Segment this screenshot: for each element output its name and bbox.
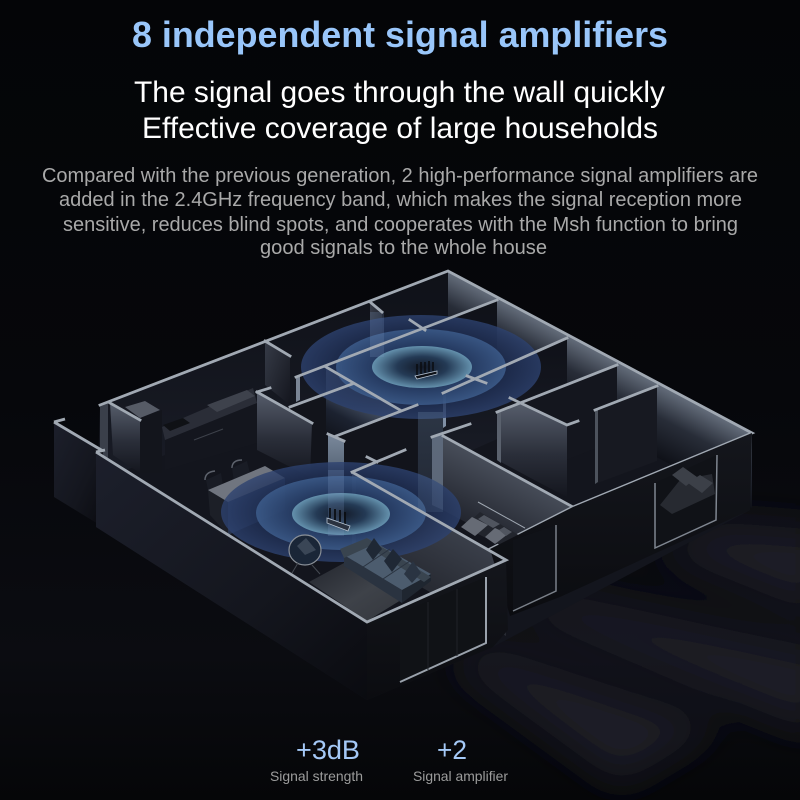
description paragraph: [42, 165, 758, 259]
outer left walls: [54, 419, 367, 700]
living room floor: [309, 563, 401, 621]
router lower: [327, 508, 350, 531]
router upper: [415, 361, 437, 379]
title: 8 independent signal amplifiers: [132, 14, 668, 55]
dining table and chairs: [205, 460, 285, 535]
signal rings: lower router: [221, 462, 461, 562]
front glass door: [400, 577, 486, 682]
front wall: right wing: [490, 433, 752, 616]
signal beams: [328, 312, 443, 536]
interior wall faces: [110, 300, 657, 636]
stat: signal strength: Signal strength: [270, 768, 363, 784]
building floor: [96, 271, 752, 700]
kitchen furniture: [125, 388, 257, 473]
bedroom window with bed: [655, 455, 717, 548]
signal rings: upper router: [301, 315, 541, 419]
description paragraph: Compared with the previous generation, 2 high-performance signal amplifiers are: [42, 165, 758, 187]
armchair: [289, 535, 321, 574]
main sofa: [340, 538, 431, 603]
subtitle: The signal goes through the wall quickly: [134, 76, 665, 109]
stat: signal amplifier: +2: [437, 735, 467, 765]
description paragraph: added in the 2.4GHz frequency band, which makes the signal reception more: [59, 189, 742, 211]
stat: signal amplifier: [413, 735, 508, 784]
isometric floor plan: [54, 271, 752, 700]
front wall: living room: [367, 560, 508, 700]
description paragraph: sensitive, reduces blind spots, and cooperates with the Msh function to bring: [63, 214, 738, 236]
subtitle: [134, 76, 665, 145]
description paragraph: good signals to the whole house: [260, 237, 547, 259]
wall tops: [100, 271, 752, 549]
middle glass door: [513, 525, 556, 611]
floor light spill: [452, 522, 800, 785]
front wall tops: [96, 452, 506, 622]
subtitle: Effective coverage of large households: [142, 112, 658, 145]
back wall faces: [100, 271, 752, 508]
stat: signal amplifier: Signal amplifier: [413, 768, 508, 784]
small sofa: [461, 502, 525, 545]
stat: signal strength: +3dB: [296, 735, 360, 765]
stat: signal strength: [270, 735, 363, 784]
